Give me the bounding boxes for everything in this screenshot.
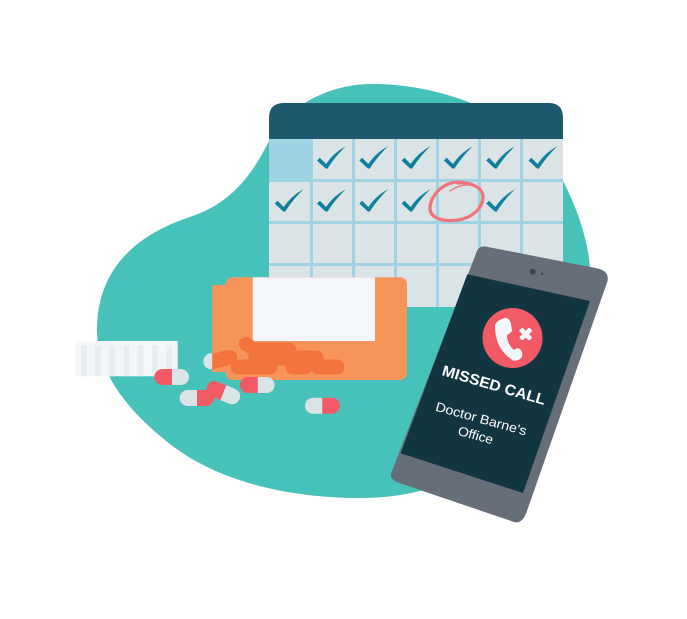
caller name line two: Office bbox=[456, 423, 495, 447]
capsule four bbox=[305, 398, 340, 414]
bottle label bbox=[253, 277, 375, 341]
calendar bbox=[269, 103, 563, 307]
calendar header bbox=[269, 103, 563, 139]
phone body bbox=[391, 246, 608, 522]
calendar grid background bbox=[269, 135, 563, 307]
pills inside bottle bbox=[238, 344, 337, 367]
phone bbox=[391, 246, 608, 522]
check marks bbox=[275, 146, 557, 212]
handset bbox=[495, 318, 522, 361]
bottle cap edge bbox=[212, 285, 235, 372]
capsule three bbox=[240, 377, 275, 393]
pill strip bbox=[75, 341, 178, 376]
pill bottle bbox=[212, 277, 407, 380]
capsule two bbox=[180, 390, 214, 406]
icon circle bbox=[482, 308, 542, 368]
strip ridges bbox=[81, 345, 172, 376]
calendar cells bbox=[269, 139, 563, 307]
capsule one bbox=[154, 369, 189, 385]
phone screen bbox=[401, 274, 590, 493]
caller name line one: Doctor Barne's bbox=[434, 399, 529, 439]
red hand-drawn circle bbox=[430, 182, 483, 221]
missed call icon bbox=[482, 308, 542, 368]
x mark bbox=[516, 324, 535, 344]
tilted capsule bbox=[204, 379, 243, 407]
teal background blob bbox=[97, 84, 590, 498]
dark tilted pill bbox=[212, 350, 237, 370]
missed call heading: MISSED CALL bbox=[440, 363, 547, 409]
phone camera bbox=[530, 269, 544, 275]
strip background bbox=[75, 341, 178, 376]
bottle body bbox=[226, 277, 407, 380]
capsule behind bottle bbox=[203, 353, 233, 369]
